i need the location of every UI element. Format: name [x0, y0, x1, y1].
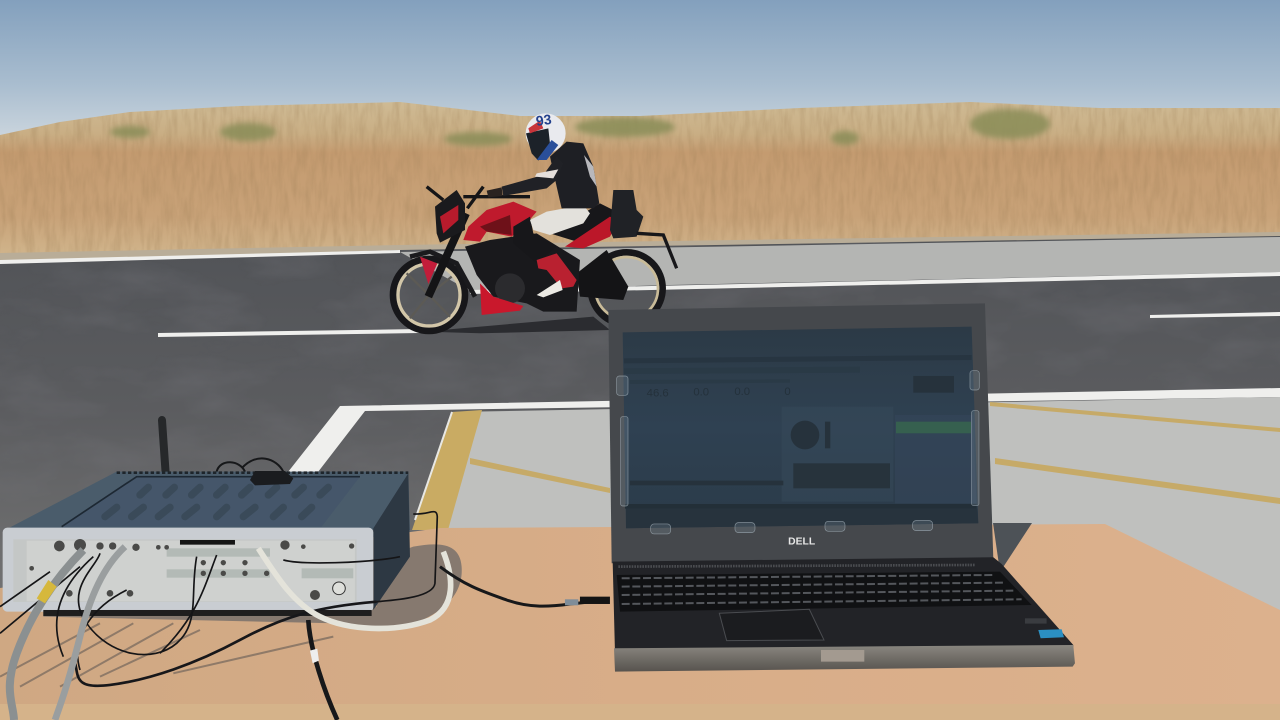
clear screen clips — [617, 371, 979, 534]
road far shoulder — [400, 237, 1280, 291]
data logger — [0, 420, 610, 720]
sticker — [1038, 629, 1064, 638]
swingarm — [577, 250, 628, 300]
laptop screen — [623, 327, 978, 528]
screen content — [624, 355, 978, 528]
logger top — [5, 472, 410, 530]
latch — [821, 650, 864, 662]
panel strips and connectors — [29, 539, 354, 600]
road texture — [123, 274, 1150, 322]
screen content: 0 — [784, 386, 791, 398]
table — [0, 524, 1280, 720]
gravel verge — [0, 232, 1280, 262]
engine and frame — [465, 233, 580, 312]
rear wheel — [591, 252, 663, 324]
front fork — [428, 213, 466, 297]
front wheel — [393, 259, 465, 331]
logger shadow on table — [43, 544, 462, 628]
seat and tail — [550, 203, 620, 242]
screen content: 0.0 — [734, 386, 750, 398]
keyboard — [617, 572, 1032, 612]
antenna — [162, 420, 166, 473]
apron pad — [412, 397, 1280, 625]
table front edge — [0, 704, 1280, 720]
GPS puck — [250, 471, 293, 485]
white cable — [258, 548, 451, 628]
logger front frame — [3, 528, 373, 612]
gray cable two — [55, 547, 125, 720]
sky — [0, 0, 1280, 140]
trackpad — [719, 609, 824, 641]
rider leg — [513, 217, 557, 263]
screen content: 46.6 — [647, 388, 669, 400]
fuel tank — [463, 202, 537, 242]
laptop — [608, 303, 1075, 672]
road markings — [0, 250, 1280, 472]
gray cable one — [10, 550, 83, 720]
laptop shadow on table — [993, 523, 1032, 572]
vent slots — [105, 487, 328, 517]
helmet — [526, 111, 566, 161]
bike shadow — [423, 317, 610, 333]
screen content: 0.0 — [693, 387, 709, 399]
dry grass field — [0, 100, 1280, 260]
data pack on tail — [610, 190, 643, 238]
front fender — [410, 252, 475, 297]
looped cables — [217, 458, 283, 472]
motorcycle and rider — [393, 111, 677, 333]
black cable with white band — [308, 620, 337, 720]
handlebar and mirror — [427, 187, 530, 208]
rider torso — [550, 142, 599, 208]
laptop front edge — [614, 645, 1075, 672]
laptop base — [613, 557, 1073, 653]
cable shadows — [0, 623, 333, 687]
rider boot — [537, 253, 577, 288]
small black signal leads — [0, 512, 437, 670]
helmet: 93 — [535, 111, 553, 129]
laptop lid — [608, 303, 993, 563]
headlight cowl — [435, 190, 465, 243]
fingerprint reader — [1025, 618, 1047, 624]
laptop logo: DELL — [788, 536, 815, 547]
rider arm — [502, 157, 563, 196]
logger right side — [373, 472, 410, 610]
belly pan — [480, 283, 523, 315]
main black cable — [73, 602, 377, 686]
road — [0, 236, 1280, 600]
laptop lead — [440, 567, 608, 606]
